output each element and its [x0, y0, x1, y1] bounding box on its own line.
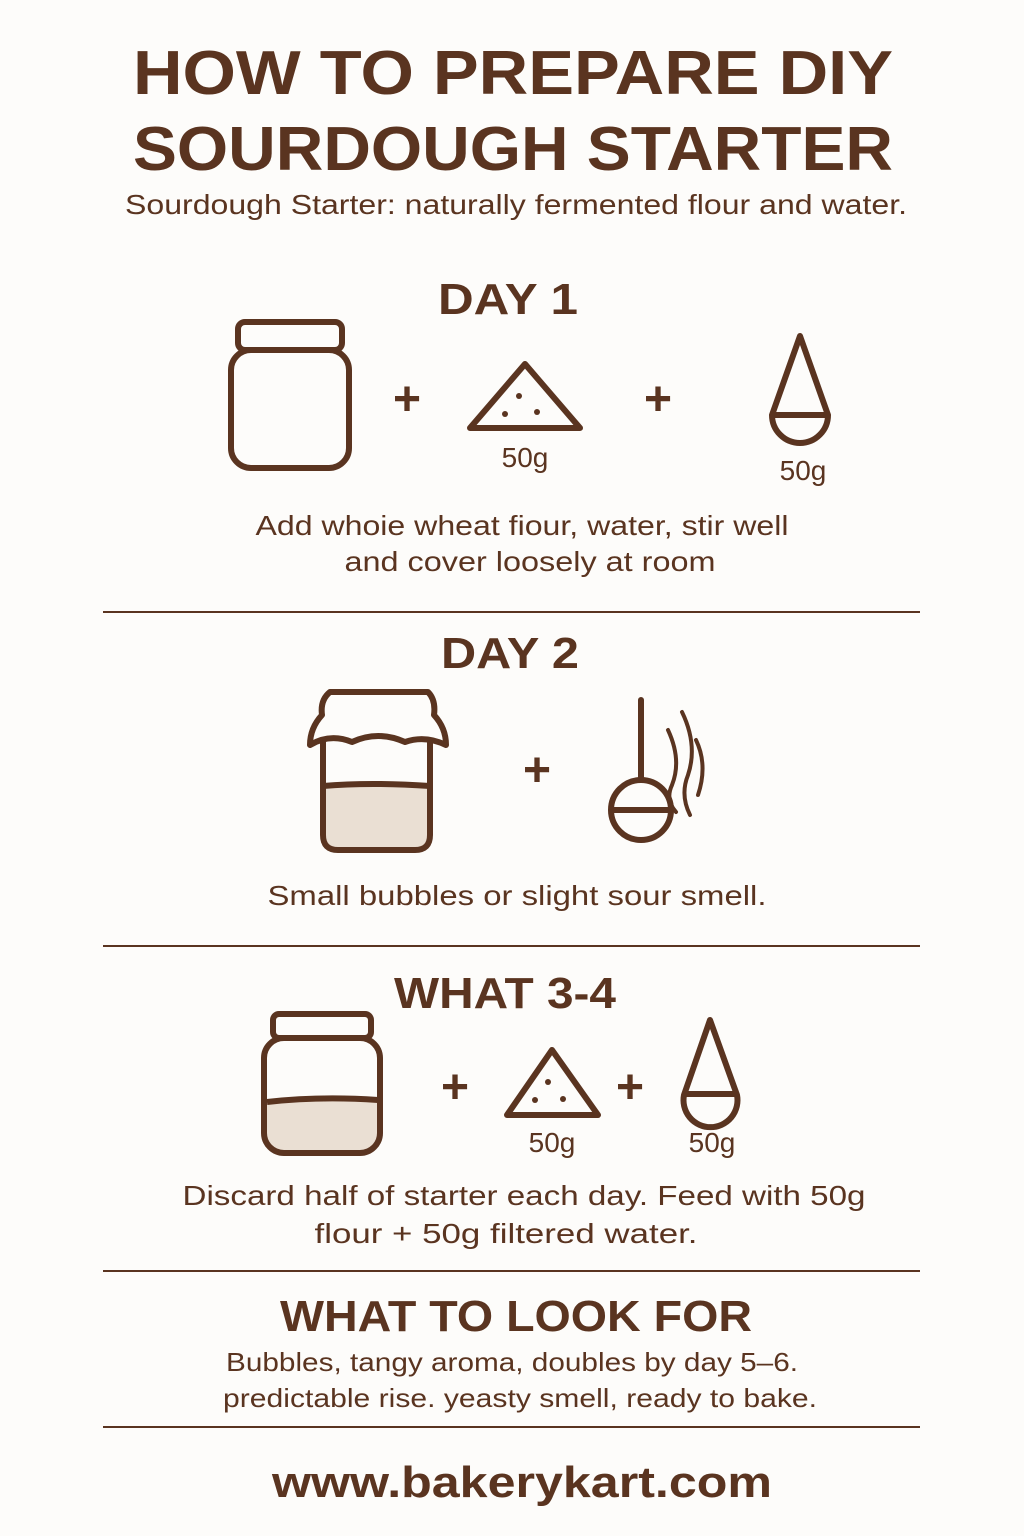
title: [133, 39, 893, 184]
icon: water drop 50g: [772, 336, 828, 486]
section: day 1: [231, 275, 828, 577]
text: signs of readiness: predictable rise. yeasty smell, ready to bake.: [223, 1383, 817, 1413]
section: days 3-4: [182, 969, 866, 1249]
heading: day 2: DAY 2: [441, 629, 579, 678]
text: days 3-4 instructions: flour + 50g filtered water.: [314, 1218, 698, 1249]
icon: spoon with aroma: [611, 700, 703, 840]
text: days 3-4 instructions: [182, 1180, 866, 1249]
plus: +: [616, 1061, 644, 1114]
title: HOW TO PREPARE DIY: [133, 39, 893, 108]
text: day 1 instructions: and cover loosely at room: [344, 546, 716, 577]
plus: +: [644, 373, 672, 426]
icon: jar with starter: [264, 1014, 380, 1153]
section: what to look for: [223, 1292, 817, 1413]
icon: water drop 50g: 50g: [689, 1127, 735, 1158]
plus: +: [441, 1061, 469, 1114]
section: day 2: [268, 629, 766, 911]
heading: what to look for: WHAT TO LOOK FOR: [280, 1292, 752, 1341]
plus: +: [393, 373, 421, 426]
footer: website: www.bakerykart.com: [271, 1458, 772, 1507]
icon: flour 50g: 50g: [529, 1127, 575, 1158]
heading: what 3-4: WHAT 3-4: [394, 969, 617, 1018]
subtitle: Sourdough Starter: naturally fermented flour and water.: [125, 189, 907, 220]
text: day 1 instructions: Add whoie wheat fiour, water, stir well: [256, 510, 788, 541]
icon: flour 50g: [507, 1050, 598, 1158]
text: day 1 instructions: [256, 510, 788, 577]
text: days 3-4 instructions: Discard half of starter each day. Feed with 50g: [182, 1180, 866, 1211]
text: signs of readiness: Bubbles, tangy aroma, doubles by day 5–6.: [226, 1347, 798, 1377]
icon: empty jar: [231, 322, 349, 468]
icon: water drop 50g: [683, 1020, 738, 1158]
text: day 2 observation: Small bubbles or slight sour smell.: [268, 880, 766, 911]
plus: +: [523, 744, 551, 797]
title: SOURDOUGH STARTER: [133, 115, 893, 184]
icon: flour 50g: [470, 364, 580, 473]
icon: flour 50g: 50g: [502, 442, 548, 473]
text: signs of readiness: [223, 1347, 817, 1413]
heading: day 1: DAY 1: [438, 275, 578, 324]
icon: water drop 50g: 50g: [780, 455, 826, 486]
icon: covered jar with starter: [310, 692, 446, 850]
